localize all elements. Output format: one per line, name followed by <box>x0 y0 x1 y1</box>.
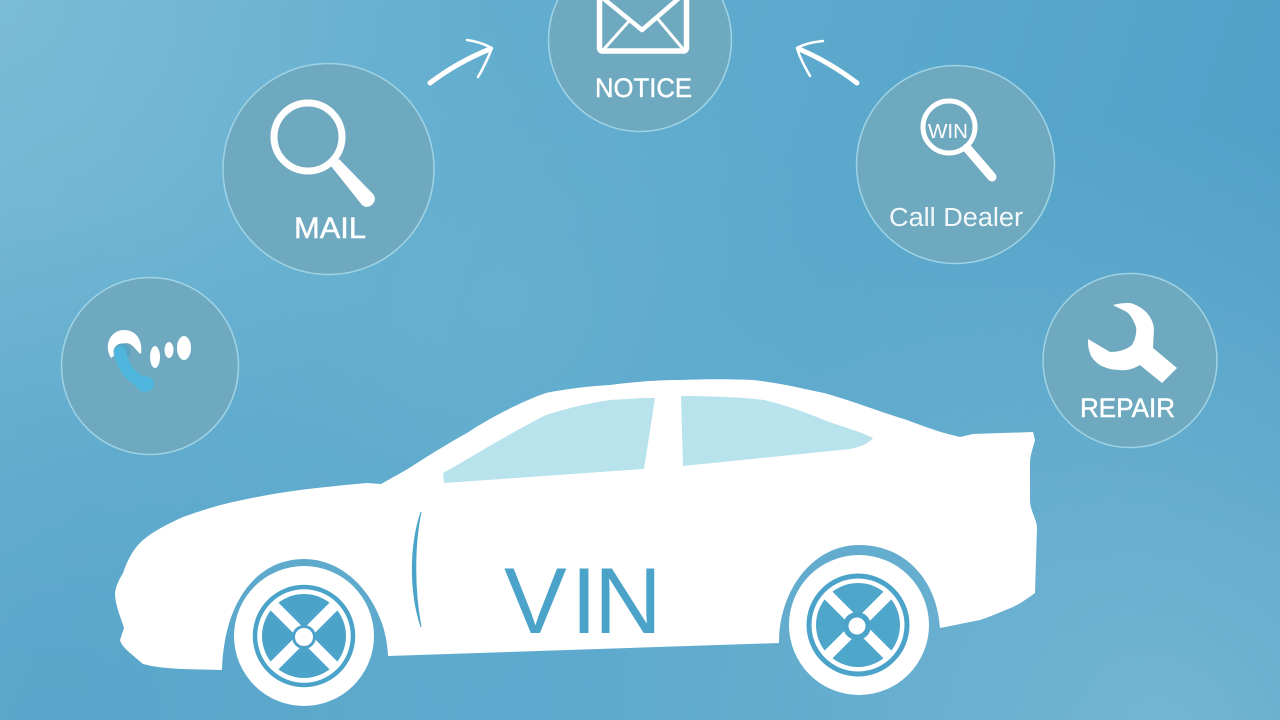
front wheel <box>234 566 374 706</box>
arrow: mail to notice <box>430 40 492 83</box>
rear wheel <box>789 555 929 695</box>
arrow: call dealer to notice <box>797 41 857 83</box>
panel: phone step <box>62 278 238 454</box>
label: NOTICE: NOTICE <box>595 73 692 103</box>
label: Call Dealer: Call Dealer <box>889 204 1024 232</box>
panel: call dealer step <box>856 66 1054 264</box>
panel: repair step <box>1043 274 1217 448</box>
panel: mail step <box>223 64 434 274</box>
car body <box>115 379 1037 670</box>
icon: phone with signal dots <box>108 330 191 392</box>
rear window <box>681 396 873 466</box>
front window <box>443 398 655 483</box>
icon: envelope <box>600 0 686 51</box>
VIN label: VIN <box>504 548 662 653</box>
icon: wrench <box>1088 303 1177 383</box>
icon: magnifying glass over VIN <box>923 101 992 177</box>
label: MAIL: MAIL <box>294 212 366 245</box>
car illustration <box>115 379 1037 706</box>
icon: magnifying glass <box>274 103 375 207</box>
panel: notice step <box>548 0 732 132</box>
icon: magnifying glass over VIN: WIN <box>928 121 968 143</box>
door line <box>412 512 421 627</box>
label: REPAIR: REPAIR <box>1080 393 1175 423</box>
